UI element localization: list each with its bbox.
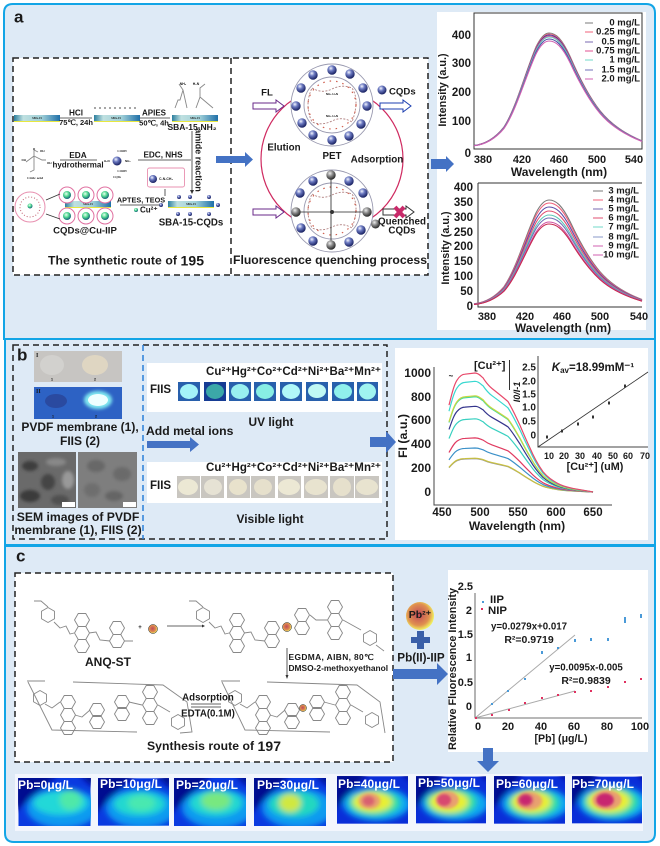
citric acid structure: OH xyxy=(40,149,44,153)
amide reaction arrow: amide reaction xyxy=(194,128,204,192)
UV light caption: UV light xyxy=(249,415,293,429)
inset y ticks xyxy=(522,362,536,442)
synthesis route box xyxy=(15,573,393,762)
citric acid structure: OH xyxy=(47,161,52,165)
SBA-15 bar 2: SBA-15 xyxy=(111,116,121,120)
photo II UV: 2 xyxy=(95,414,98,418)
add metal ions arrow xyxy=(147,437,199,452)
Cu concentration arrow xyxy=(449,360,510,390)
y axis ticks: 100 xyxy=(452,116,471,128)
y axis ticks: 100 xyxy=(454,271,473,283)
y axis ticks: 0.5 xyxy=(458,677,473,689)
Quenched CQDs label xyxy=(371,216,426,236)
legend: 0.75 mg/L xyxy=(596,46,640,56)
IIP points xyxy=(491,614,642,705)
imprinted particle xyxy=(15,192,60,222)
add metal ions label: Add metal ions xyxy=(146,424,234,438)
fluorescence quenching scheme xyxy=(233,64,427,267)
SBA-15-CQDs bar: SBA-15 xyxy=(186,202,196,206)
legend: 0.5 mg/L xyxy=(601,36,640,48)
CQDs@Cu-IIP label: CQDs@Cu-IIP xyxy=(53,226,117,236)
imprinted polymer with lead xyxy=(221,681,385,734)
heatmap 70 xyxy=(572,776,642,824)
x axis ticks: 420 xyxy=(513,154,531,166)
y axis ticks: 1 xyxy=(466,652,472,664)
heatmap 40 xyxy=(337,776,408,824)
y axis ticks: 0 xyxy=(465,148,471,160)
x axis ticks xyxy=(475,721,649,733)
heatmap 60 xyxy=(494,776,565,824)
heatmap labels: Pb=10μg/L xyxy=(100,777,162,791)
legend: 2.0 mg/L xyxy=(601,74,640,84)
visible row xyxy=(147,462,382,503)
y axis ticks xyxy=(452,30,471,160)
polymerization conditions: DMSO-2-methoxyethanol xyxy=(288,663,388,673)
IIP regression: R²=0.9719 xyxy=(504,634,554,646)
y axis ticks: 50 xyxy=(460,286,473,298)
heatmap labels: Pb=20μg/L xyxy=(176,778,238,792)
emission arrow top xyxy=(380,100,411,112)
inset y ticks: 0 xyxy=(530,430,536,442)
SBA-15 bar 1 xyxy=(14,115,60,122)
NIP regression: R²=0.9839 xyxy=(561,675,611,687)
legend: 6 mg/L xyxy=(608,212,639,224)
inset x ticks: 50 xyxy=(608,451,618,461)
Kav value: K xyxy=(552,362,561,374)
heatmap 50 xyxy=(416,776,486,824)
SBA-15-NH2 label: SBA-15-NH₂ xyxy=(167,122,217,132)
SBA-15 bar 3 with amines: SBA-15 xyxy=(190,116,200,120)
y axis ticks: 800 xyxy=(411,390,431,404)
legend: 9 mg/L xyxy=(608,240,639,252)
x axis ticks: 650 xyxy=(583,507,603,519)
adsorption elution arrows xyxy=(181,692,235,720)
citric acid structure: Citric acid xyxy=(27,176,43,180)
amide group box: C-N-CH₂ xyxy=(159,177,173,181)
coordination arrow xyxy=(167,624,205,628)
synthesis and quenching scheme box xyxy=(13,58,428,275)
inset x ticks: 10 xyxy=(544,451,554,461)
excitation arrow bottom xyxy=(253,206,284,218)
IIP regression xyxy=(491,622,567,646)
inset x ticks: 40 xyxy=(592,451,602,461)
Kav value: av xyxy=(560,366,570,374)
inset x title: [Cu²⁺] (uM) xyxy=(567,461,624,473)
photo II UV: II xyxy=(36,389,41,395)
lead calibration chart xyxy=(447,570,649,752)
Kav value: =18.99mM⁻¹ xyxy=(569,362,634,374)
y axis ticks: 300 xyxy=(452,58,471,70)
plus icon xyxy=(411,631,430,649)
citric acid structure xyxy=(22,147,52,180)
CQDs label xyxy=(378,86,416,98)
APTES TEOS Cu step: APTES, TEOS xyxy=(117,196,165,204)
legend xyxy=(593,186,639,260)
PVDF caption: PVDF membrane (1), xyxy=(21,420,139,434)
y axis ticks: 1000 xyxy=(404,366,431,380)
APTES TEOS Cu step: Cu²⁺ xyxy=(140,206,158,214)
FIIS label: FIIS xyxy=(150,384,171,396)
synthesis route caption: Synthesis route of 197 xyxy=(147,738,281,754)
synthetic route scheme xyxy=(14,82,223,268)
Adsorption label: Adsorption xyxy=(351,154,403,166)
SBA-15-CQDs label: SBA-15-CQDs xyxy=(159,218,223,228)
x axis ticks: 500 xyxy=(588,154,606,166)
SEM caption: membrane (1), FIIS (2) xyxy=(14,523,142,537)
legend: 5 mg/L xyxy=(608,204,639,214)
SBA-15-CQDs bar xyxy=(159,195,220,216)
y axis ticks: 400 xyxy=(452,30,471,42)
y axis ticks: 1.5 xyxy=(458,629,473,641)
fluorescence quenching caption: Fluorescence quenching process xyxy=(233,253,427,267)
NIP regression: y=0.0095x-0.005 xyxy=(549,662,623,674)
y axis ticks: 2 xyxy=(466,605,472,617)
panel c xyxy=(5,546,655,842)
y axis ticks: 200 xyxy=(452,87,471,99)
inset y ticks: 1.5 xyxy=(522,390,536,400)
SEM image 1 xyxy=(18,452,76,508)
blue divider xyxy=(142,345,144,539)
heatmap labels: Pb=0μg/L xyxy=(18,778,73,792)
panel a label: a xyxy=(14,8,24,26)
heatmap labels xyxy=(18,776,634,792)
inset y title: I0/I-1 xyxy=(512,382,522,402)
imprinted polymer bar xyxy=(59,187,113,224)
photo II UV xyxy=(34,387,122,419)
legend: 0 mg/L xyxy=(609,18,640,28)
y axis ticks xyxy=(458,581,473,713)
CQDs label: CQDs xyxy=(389,86,416,98)
y axis ticks: 400 xyxy=(454,182,473,194)
legend: 10 mg/L xyxy=(603,250,639,260)
heatmap 10 xyxy=(98,778,169,826)
panel b label: b xyxy=(17,346,27,364)
y axis title: Intensity (a.u.) xyxy=(440,211,452,285)
arrow to heatmaps xyxy=(477,748,499,772)
y axis ticks: 300 xyxy=(454,212,473,224)
x axis title: Wavelength (nm) xyxy=(469,519,565,533)
heatmap 0 xyxy=(18,778,91,826)
Cu concentration arrow: [Cu²⁺] xyxy=(474,360,506,372)
SEM caption: SEM images of PVDF xyxy=(17,510,139,524)
y axis title: Intensity (a.u.) xyxy=(437,53,449,127)
EDA hydrothermal step: EDA xyxy=(69,150,87,160)
inset Stern-Volmer plot xyxy=(512,356,650,473)
inset x ticks xyxy=(544,451,650,461)
ANQ-ST label: ANQ-ST xyxy=(85,655,132,669)
y axis ticks: 150 xyxy=(454,256,473,268)
x axis ticks: 540 xyxy=(630,311,648,323)
ion labels: Cu²⁺Hg²⁺Co²⁺Cd²⁺Ni²⁺Ba²⁺Mn²⁺ xyxy=(206,462,381,474)
quenched sphere bottom xyxy=(291,170,373,252)
FL label: FL xyxy=(261,88,273,98)
x axis ticks: 550 xyxy=(508,507,528,519)
panel b background xyxy=(5,339,655,545)
heatmap labels: Pb=70μg/L xyxy=(572,777,634,791)
SBA-15 bar 1: SBA-15 xyxy=(32,116,42,120)
imprinted polymer bar: SBA-15 xyxy=(83,202,93,206)
CQD ball: COOH xyxy=(117,149,127,153)
EDC NHS step: EDC, NHS xyxy=(143,150,183,160)
NIP points xyxy=(475,678,642,719)
SEM image 2 xyxy=(78,452,137,508)
Quenched CQDs label: Quenched xyxy=(378,216,426,228)
SBA-15 bar 3 with amines: H₂N xyxy=(193,82,200,86)
x axis ticks xyxy=(478,311,648,323)
legend: 3 mg/L xyxy=(608,186,639,196)
IIP regression: y=0.0279x+0.017 xyxy=(491,622,567,632)
y axis ticks: 200 xyxy=(411,461,431,475)
polymerization conditions: EGDMA, AIBN, 80℃ xyxy=(288,652,374,662)
legend: 4 mg/L xyxy=(608,194,639,206)
inset y ticks: 2.5 xyxy=(522,362,536,374)
x axis ticks: 600 xyxy=(546,507,566,519)
legend: 1.5 mg/L xyxy=(601,64,640,76)
heatmap labels: Pb=60μg/L xyxy=(496,777,558,791)
inset y ticks: 0.5 xyxy=(522,416,536,428)
x axis ticks: 80 xyxy=(601,721,613,733)
y axis ticks xyxy=(404,366,431,499)
y axis ticks: 0 xyxy=(466,701,472,713)
y axis ticks: 0 xyxy=(467,301,473,313)
heatmap 20 xyxy=(174,778,246,826)
legend: IIP xyxy=(490,594,504,606)
HCl step: HCl xyxy=(69,108,83,118)
arrow to Cu chart xyxy=(370,431,396,453)
legend: 0.25 mg/L xyxy=(596,26,640,38)
arrow to lead chart xyxy=(393,663,448,685)
spectra background xyxy=(437,12,646,330)
HCl step: 75℃, 24h xyxy=(59,118,93,127)
x axis ticks: 460 xyxy=(553,311,571,323)
heatmap 30 xyxy=(254,778,326,826)
FIIS label: FIIS xyxy=(150,480,171,492)
APIES step: 50℃, 4h xyxy=(139,118,169,128)
x axis ticks: 540 xyxy=(625,154,643,166)
panel a xyxy=(4,4,655,339)
photo I daylight: 1 xyxy=(51,376,54,382)
polymerization conditions xyxy=(288,652,388,673)
APIES step: APIES xyxy=(142,108,167,118)
y axis title: FI (a.u.) xyxy=(396,414,410,458)
x axis ticks: 450 xyxy=(432,507,452,519)
Pb(II)-IIP label: Pb(II)-IIP xyxy=(397,652,445,664)
heatmap labels: Pb=40μg/L xyxy=(338,777,400,791)
heatmap strip xyxy=(14,772,647,831)
molecule with lead complex xyxy=(189,600,384,652)
Cu fluorescence chart xyxy=(395,348,650,540)
heatmap labels: Pb=30μg/L xyxy=(257,778,319,792)
x axis title: Wavelength (nm) xyxy=(511,165,607,179)
SBA-15 bar 3 with amines xyxy=(172,82,218,122)
SBA-15 bar 3 with amines: NH₂ xyxy=(180,82,187,86)
lead ion xyxy=(148,624,158,634)
panel c label: c xyxy=(16,546,25,566)
photo I daylight xyxy=(34,351,122,382)
x axis ticks: 20 xyxy=(502,721,514,733)
x axis ticks: 380 xyxy=(474,154,492,166)
excitation arrow top xyxy=(253,100,284,112)
inset y ticks: 2.0 xyxy=(522,376,536,388)
template-free imprinted polymer xyxy=(27,681,192,734)
legend: NIP xyxy=(488,605,507,617)
photo II UV: 1 xyxy=(52,414,55,418)
quenched emission arrow xyxy=(383,206,414,218)
CQD imprinted sphere top xyxy=(291,64,373,146)
heatmap labels: Pb=50μg/L xyxy=(418,776,480,790)
HCl step xyxy=(59,108,93,127)
x axis ticks: 0 xyxy=(475,721,481,733)
amide group box xyxy=(148,168,184,196)
x axis title: Wavelength (nm) xyxy=(515,321,611,335)
NIP regression xyxy=(549,662,623,687)
arrow between schemes xyxy=(216,152,253,167)
synthetic route caption: The synthetic route of 195 xyxy=(48,252,204,268)
legend: 8 mg/L xyxy=(608,232,639,242)
y axis ticks: 2.5 xyxy=(458,581,473,593)
inset y ticks: 1.0 xyxy=(522,402,536,414)
x axis ticks: 500 xyxy=(470,507,490,519)
x axis ticks: 40 xyxy=(535,721,547,733)
legend xyxy=(481,594,507,617)
APTES TEOS Cu step xyxy=(117,196,165,214)
panel c background xyxy=(5,546,655,842)
inset x ticks: 60 xyxy=(623,451,633,461)
x axis ticks: 500 xyxy=(591,311,609,323)
CQD ball: COOH xyxy=(117,169,127,173)
inset x ticks: 20 xyxy=(559,451,569,461)
polymerization arrow xyxy=(286,648,288,679)
x axis ticks: 420 xyxy=(516,311,534,323)
EDA hydrothermal step: hydrothermal xyxy=(52,160,104,170)
citric acid structure: O xyxy=(33,147,36,151)
y axis ticks: 200 xyxy=(454,241,473,253)
left dashed box xyxy=(13,345,387,539)
CQD imprinted sphere top: NH₂ H₂N xyxy=(326,92,338,96)
ion labels: Cu²⁺Hg²⁺Co²⁺Cd²⁺Ni²⁺Ba²⁺Mn²⁺ xyxy=(206,366,381,378)
legend xyxy=(585,18,640,84)
APIES step xyxy=(139,108,170,128)
Elution label: Elution xyxy=(267,142,301,154)
y axis title: Relative Fluorescence Intensity xyxy=(447,588,459,750)
photo I daylight: 2 xyxy=(94,376,97,382)
x axis ticks xyxy=(432,507,603,519)
panel a background xyxy=(4,4,655,339)
x axis ticks: 380 xyxy=(478,311,496,323)
x axis ticks: 460 xyxy=(550,154,568,166)
visible light caption: Visible light xyxy=(236,512,304,526)
y axis ticks: 0 xyxy=(424,485,431,499)
y axis ticks: 400 xyxy=(411,437,431,451)
x axis ticks: 100 xyxy=(631,721,649,733)
PVDF caption: FIIS (2) xyxy=(60,434,100,448)
SEM caption xyxy=(14,510,142,537)
PET label: PET xyxy=(322,151,342,162)
Quenched CQDs label: CQDs xyxy=(388,226,416,236)
arrow to spectra xyxy=(431,156,454,172)
UV sample tiles xyxy=(178,382,378,401)
molecule ANQ-ST xyxy=(34,601,133,652)
legend: 1 mg/L xyxy=(609,54,640,66)
spectrum chart high concentration xyxy=(440,182,648,335)
x axis title: [Pb] (μg/L) xyxy=(535,733,587,745)
spectrum chart low concentration xyxy=(437,13,643,179)
CQD ball: H₂N xyxy=(104,159,110,163)
PVDF caption xyxy=(21,420,139,448)
EDA hydrothermal step xyxy=(52,150,104,170)
plus sign: + xyxy=(138,625,142,631)
y axis ticks: 250 xyxy=(454,227,473,239)
x axis ticks xyxy=(474,154,643,166)
CQD ball: CQDs xyxy=(113,175,122,179)
y axis ticks: 350 xyxy=(454,197,473,209)
legend: 7 mg/L xyxy=(608,222,639,232)
y axis ticks: 600 xyxy=(411,413,431,427)
Pb2+ ball: Pb²⁺ xyxy=(409,609,432,621)
EDC NHS step xyxy=(138,150,191,160)
panel b xyxy=(5,339,655,545)
SBA-15 bar 2 xyxy=(94,108,140,122)
quenching cycle ring xyxy=(261,88,403,230)
photo I daylight: I xyxy=(36,353,39,359)
inset x ticks: 70 xyxy=(640,451,650,461)
inset x ticks: 30 xyxy=(575,451,585,461)
Cu concentration arrow: ~ xyxy=(449,372,454,380)
y axis ticks xyxy=(454,182,473,313)
CQD imprinted sphere top: NH₂ H₂N xyxy=(326,114,338,118)
citric acid structure: OH xyxy=(22,158,26,162)
adsorption elution arrows: Adsorption xyxy=(182,692,234,704)
UV row xyxy=(147,363,382,412)
visible sample tiles xyxy=(177,476,379,498)
x axis ticks: 60 xyxy=(568,721,580,733)
Pb2+ ball xyxy=(406,602,434,630)
CQD ball: NH₂ xyxy=(125,159,131,163)
adsorption elution arrows: EDTA(0.1M) xyxy=(181,708,235,720)
CQD ball xyxy=(104,149,131,179)
